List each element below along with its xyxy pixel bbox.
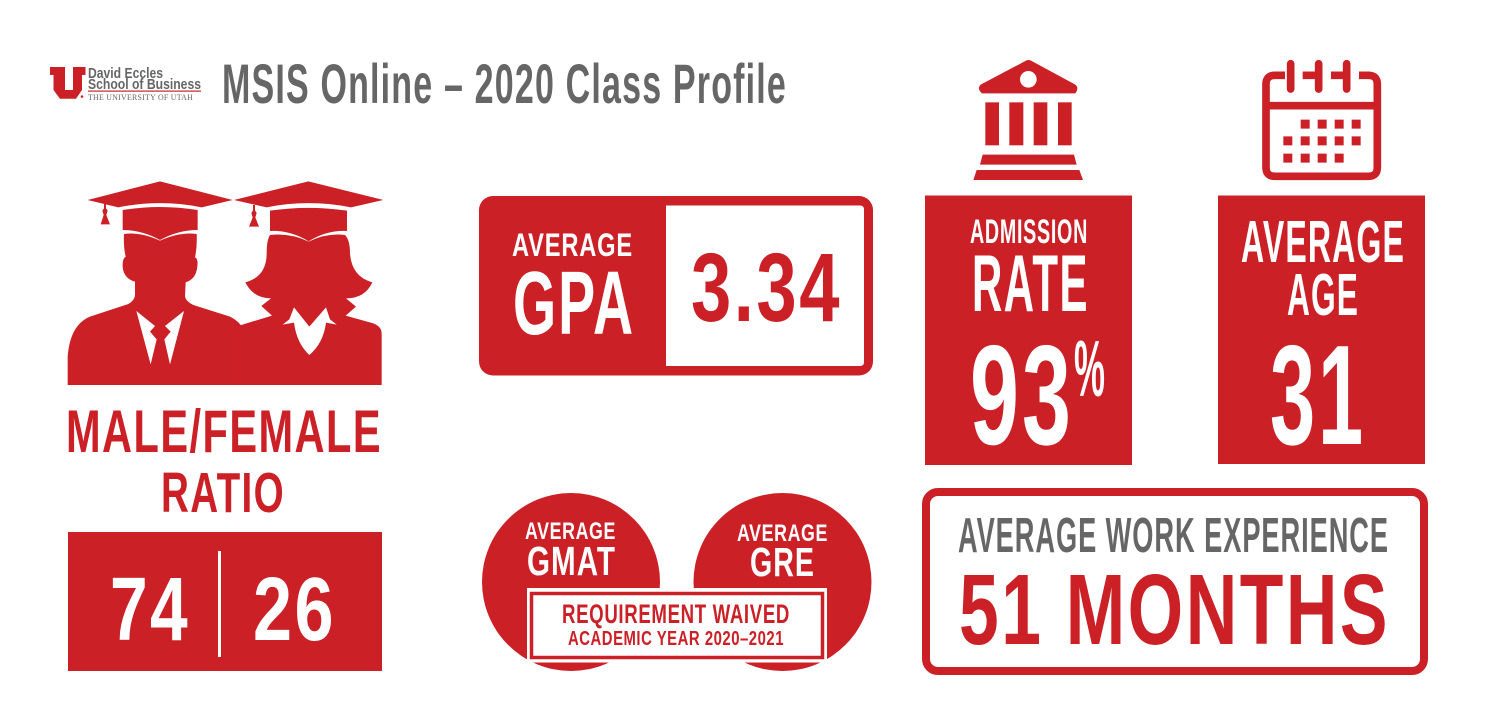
- panel: ratio 74 | 26: [68, 532, 382, 671]
- panel: average GPA: 3.34: [691, 233, 842, 342]
- logo text: [88, 66, 201, 102]
- logo text: THE UNIVERSITY OF UTAH: [88, 93, 193, 102]
- icon: university building: [973, 60, 1083, 180]
- GRE circle: GRE: [750, 539, 815, 585]
- requirement waived callout: ACADEMIC YEAR 2020–2021: [568, 628, 784, 650]
- requirement waived callout: REQUIREMENT WAIVED: [562, 599, 790, 629]
- GMAT circle: [482, 493, 660, 671]
- panel: admission rate: RATE: [972, 239, 1089, 329]
- icon: male and female graduates: [68, 181, 383, 385]
- icon: calendar: [1266, 64, 1377, 176]
- panel: average age: [1218, 196, 1425, 475]
- panel: average GPA: AVERAGE: [512, 227, 633, 263]
- panel: average age: 31: [1270, 316, 1366, 475]
- panel: average work experience: [926, 492, 1424, 671]
- heading: male/female ratio: RATIO: [161, 461, 285, 525]
- panel: admission rate: %: [1074, 324, 1105, 413]
- heading: male/female ratio: MALE/FEMALE: [66, 398, 382, 465]
- panel: admission rate: 93: [970, 316, 1074, 475]
- panel: average GPA: [479, 196, 873, 376]
- panel: ratio 74 | 26: 26: [253, 560, 336, 660]
- logo text: David Eccles: [88, 66, 163, 82]
- panel: ratio 74 | 26: 74: [110, 560, 190, 660]
- GMAT circle: GMAT: [527, 538, 616, 584]
- header logo: David Eccles School of Business: [50, 66, 201, 102]
- panel: admission rate: [925, 196, 1132, 475]
- icon: block U: [50, 67, 86, 99]
- heading: male/female ratio: [66, 398, 382, 525]
- panel: average GMAT and GRE, requirement waived: [482, 493, 872, 671]
- GMAT circle: AVERAGE: [525, 518, 616, 545]
- requirement waived callout: [527, 588, 827, 662]
- female graduate: [234, 181, 383, 385]
- panel: average GPA: GPA: [513, 254, 635, 354]
- title: MSIS Online – 2020 Class Profile: [222, 52, 787, 115]
- logo text: School of Business: [88, 77, 201, 93]
- panel: average age: AGE: [1287, 262, 1359, 328]
- panel: admission rate: ADMISSION: [970, 213, 1088, 251]
- GRE circle: [694, 493, 872, 671]
- GRE circle: AVERAGE: [737, 520, 828, 547]
- male graduate: [68, 181, 247, 385]
